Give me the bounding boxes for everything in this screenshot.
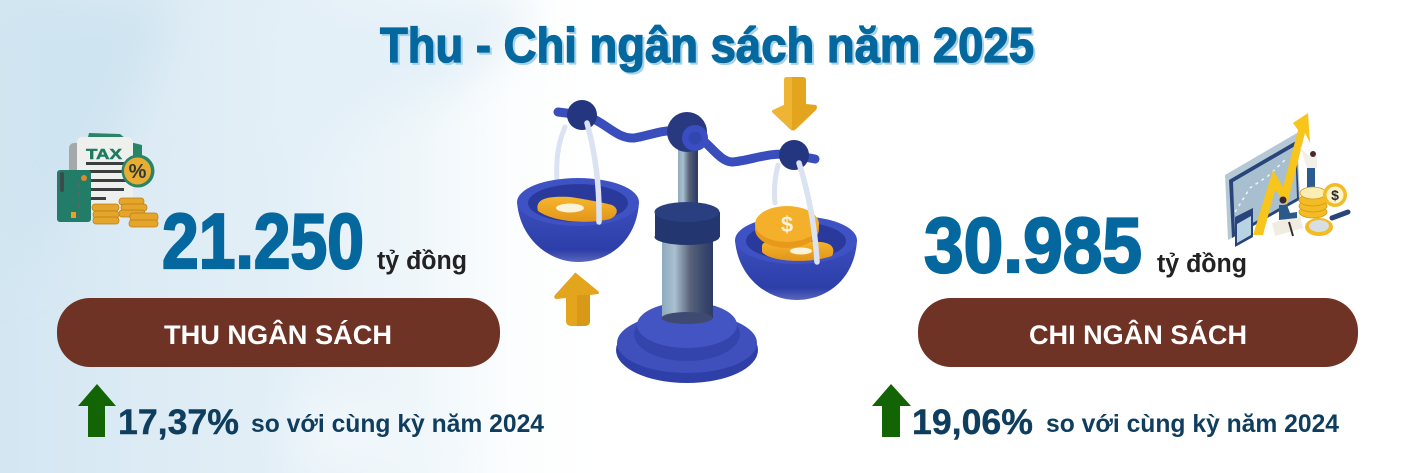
expenditure percentage: 19,06% [912, 403, 1033, 442]
expenditure comparison text: so với cùng kỳ năm 2024 [1046, 410, 1339, 438]
revenue unit: tỷ đồng [377, 247, 467, 275]
icon: up arrow [554, 273, 599, 326]
scale beam [558, 100, 815, 170]
seated woman [1272, 196, 1303, 236]
coin stack [1299, 187, 1327, 218]
icon: balance scale with coins and arrows [517, 77, 857, 383]
expenditure unit: tỷ đồng [1157, 250, 1247, 278]
revenue change [78, 384, 544, 442]
icon: rising chart with people and coins [1225, 113, 1348, 247]
left pan [517, 123, 639, 262]
expenditure pill: CHI NGÂN SÁCH [1029, 319, 1247, 350]
icon: down arrow [772, 77, 817, 130]
dollar coin: $ [1331, 187, 1339, 203]
magnifier [1305, 212, 1348, 236]
tax label: TAX [86, 146, 122, 163]
icon: tax document with card and coins [57, 133, 158, 227]
man on coins [1300, 147, 1317, 192]
right pan: $ [781, 212, 793, 237]
expenditure figure: 30.985 [924, 201, 1142, 289]
title: Thu - Chi ngân sách năm 2025 [380, 19, 1034, 73]
revenue pill [57, 298, 500, 367]
back strings [557, 127, 778, 203]
revenue percentage: 17,37% [118, 403, 239, 442]
right pan [735, 163, 857, 300]
expenditure pill [918, 298, 1358, 367]
scale pillar [654, 150, 720, 324]
revenue comparison text: so với cùng kỳ năm 2024 [251, 410, 544, 438]
scale base [616, 302, 758, 383]
revenue figure: 21.250 [162, 197, 364, 285]
icon: tax document with card and coins: % [129, 161, 147, 183]
title: Thu - Chi ngân sách năm 2025 [382, 21, 1036, 75]
icon: green up arrow [78, 384, 116, 437]
icon: green up arrow [872, 384, 911, 437]
expenditure change [872, 384, 1339, 442]
calculator [1235, 208, 1253, 247]
revenue pill: THU NGÂN SÁCH [164, 319, 392, 350]
